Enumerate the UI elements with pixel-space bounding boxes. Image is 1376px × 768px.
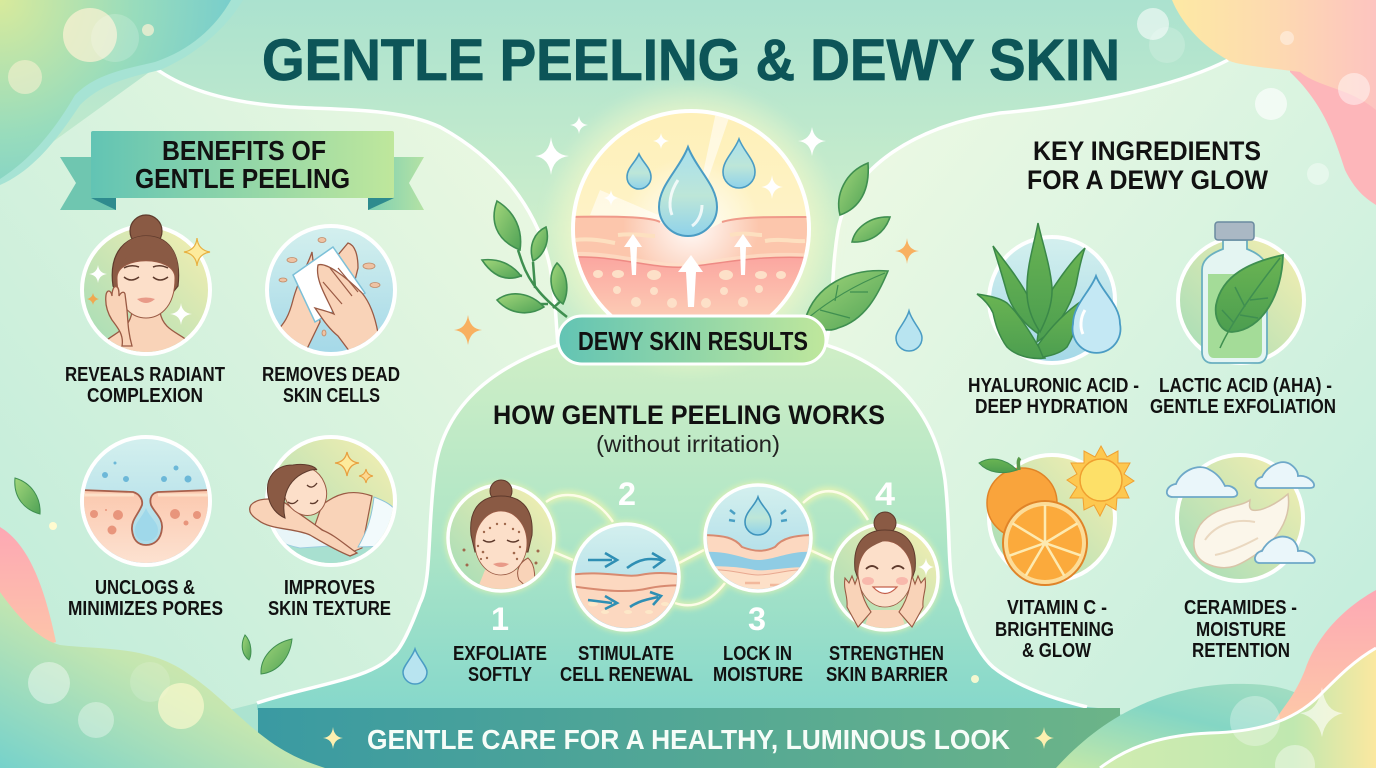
subheading: (without irritation) — [596, 431, 780, 457]
label: LACTIC ACID (AHA) - — [1159, 375, 1332, 397]
panel: how gentle peeling works — [445, 400, 948, 686]
ribbon heading: BENEFITS OF — [162, 135, 326, 166]
ribbon heading: GENTLE PEELING — [135, 163, 350, 194]
label: STRENGTHEN — [829, 643, 944, 665]
ribbon heading — [60, 131, 424, 210]
arrows — [624, 234, 752, 307]
number: 3 — [748, 601, 766, 637]
step 1: exfoliate softly: SOFTLY — [468, 664, 533, 686]
footer sparkles — [323, 727, 1054, 749]
label: CERAMIDES - — [1184, 597, 1297, 619]
footer banner — [258, 708, 1120, 768]
corner blob: top right — [1137, 0, 1376, 205]
ingredient: ceramides: RETENTION — [1192, 640, 1290, 662]
panel: how it works dome — [257, 345, 1120, 710]
center illustration: dewy skin results — [482, 79, 890, 379]
benefit: improves skin texture: SKIN TEXTURE — [268, 598, 391, 620]
number: 4 — [875, 476, 895, 512]
benefit: reveals radiant complexion: COMPLEXION — [87, 385, 203, 407]
label: UNCLOGS & — [95, 577, 195, 599]
benefit: improves skin texture — [250, 437, 400, 620]
result pill: DEWY SKIN RESULTS — [578, 326, 808, 356]
label: VITAMIN C - — [1007, 597, 1107, 619]
ingredient: lactic acid: GENTLE EXFOLIATION — [1150, 396, 1336, 418]
number: 1 — [491, 601, 509, 637]
label: REMOVES DEAD — [262, 364, 400, 386]
label: LOCK IN — [723, 643, 792, 665]
result pill — [558, 316, 826, 364]
heading — [1027, 136, 1268, 195]
connectors — [546, 491, 868, 605]
ingredient: hyaluronic acid: DEEP HYDRATION — [975, 396, 1128, 418]
heading: KEY INGREDIENTS — [1033, 136, 1261, 166]
label: HYALURONIC ACID - — [968, 375, 1139, 397]
step 3: lock in moisture — [700, 482, 815, 686]
ingredient: hyaluronic acid — [968, 223, 1139, 418]
benefit: removes dead skin cells — [262, 226, 400, 407]
water drops — [659, 147, 717, 236]
heading: FOR A DEWY GLOW — [1027, 165, 1268, 195]
title: GENTLE PEELING & DEWY SKIN — [262, 28, 1120, 93]
ingredient: lactic acid — [1150, 222, 1336, 418]
step 2: stimulate cell renewal: CELL RENEWAL — [560, 664, 693, 686]
panel: ingredients background — [826, 60, 1376, 768]
benefit: unclogs and minimizes pores — [68, 437, 223, 620]
corner blob: top left — [0, 0, 243, 185]
benefit: reveals radiant complexion — [65, 215, 225, 407]
footer text: GENTLE CARE FOR A HEALTHY, LUMINOUS LOOK — [367, 724, 1010, 755]
ingredient: vitamin c: BRIGHTENING — [995, 619, 1114, 641]
step 4: strengthen skin barrier — [826, 476, 948, 686]
benefit: removes dead skin cells: SKIN CELLS — [283, 385, 380, 407]
number: 2 — [618, 476, 636, 512]
label: REVEALS RADIANT — [65, 364, 225, 386]
label: EXFOLIATE — [453, 643, 547, 665]
label: STIMULATE — [578, 643, 674, 665]
ingredient: vitamin c — [979, 446, 1134, 662]
benefit: unclogs and minimizes pores: MINIMIZES PORES — [68, 598, 223, 620]
leaves: right — [805, 163, 890, 330]
label: IMPROVES — [284, 577, 375, 599]
floating accents — [15, 238, 979, 684]
panel: benefits background — [0, 68, 558, 768]
skin cross-section circle — [571, 109, 811, 314]
step 2: stimulate cell renewal — [560, 476, 693, 686]
ingredient: ceramides — [1167, 455, 1315, 662]
corner blob: bottom left — [0, 527, 325, 768]
step 1: exfoliate softly — [445, 480, 557, 686]
leaves: left branch — [482, 201, 567, 317]
ingredient: ceramides: MOISTURE — [1196, 619, 1286, 641]
sparkles — [535, 116, 826, 175]
ingredient: vitamin c: & GLOW — [1022, 640, 1091, 662]
panel: benefits of gentle peeling — [60, 131, 424, 620]
heading: HOW GENTLE PEELING WORKS — [493, 400, 885, 430]
step 4: strengthen skin barrier: SKIN BARRIER — [826, 664, 948, 686]
corner blob: bottom right — [1056, 590, 1376, 768]
panel: key ingredients — [968, 136, 1336, 662]
step 3: lock in moisture: MOISTURE — [713, 664, 803, 686]
